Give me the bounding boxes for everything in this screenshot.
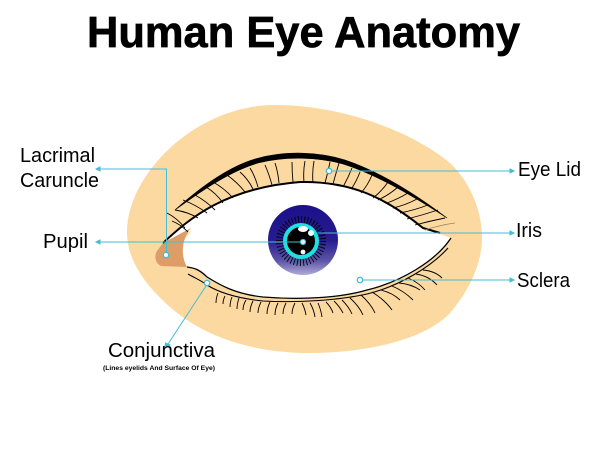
label: conjunctiva: Conjunctiva: [108, 340, 216, 362]
label: iris: Iris: [516, 220, 542, 242]
leader: pupil: [96, 239, 306, 245]
title: Human Eye Anatomy: [87, 8, 521, 57]
label: conjunctiva: (Lines eyelids And Surface Of Eye): [103, 365, 215, 372]
lacrimal caruncle: [155, 228, 191, 267]
label: lacrimal caruncle: [20, 145, 99, 192]
outer corner lash: [425, 223, 455, 230]
lower lid lines: [187, 238, 451, 298]
label: sclera: Sclera: [517, 270, 571, 292]
leader: iris: [318, 231, 514, 235]
leader: sclera: [357, 277, 514, 283]
upper eyelashes: [167, 161, 445, 232]
diagram: eye: [127, 105, 482, 353]
label: pupil: Pupil: [43, 231, 88, 253]
iris: [268, 205, 338, 275]
skin surround: [127, 105, 482, 353]
label: eye lid: Eye Lid: [518, 159, 581, 181]
leader: lacrimal caruncle: [96, 167, 169, 258]
label: lacrimal caruncle: Lacrimal: [20, 145, 95, 167]
leader: eye lid: [326, 168, 514, 174]
upper lid line: [163, 182, 440, 243]
sclera: [163, 183, 451, 298]
upper eyelid crease: [175, 153, 447, 218]
label: conjunctiva: [103, 340, 216, 372]
lower eyelashes: [216, 270, 442, 317]
leader: conjunctiva: [165, 280, 210, 348]
label: lacrimal caruncle: Caruncle: [20, 170, 99, 192]
